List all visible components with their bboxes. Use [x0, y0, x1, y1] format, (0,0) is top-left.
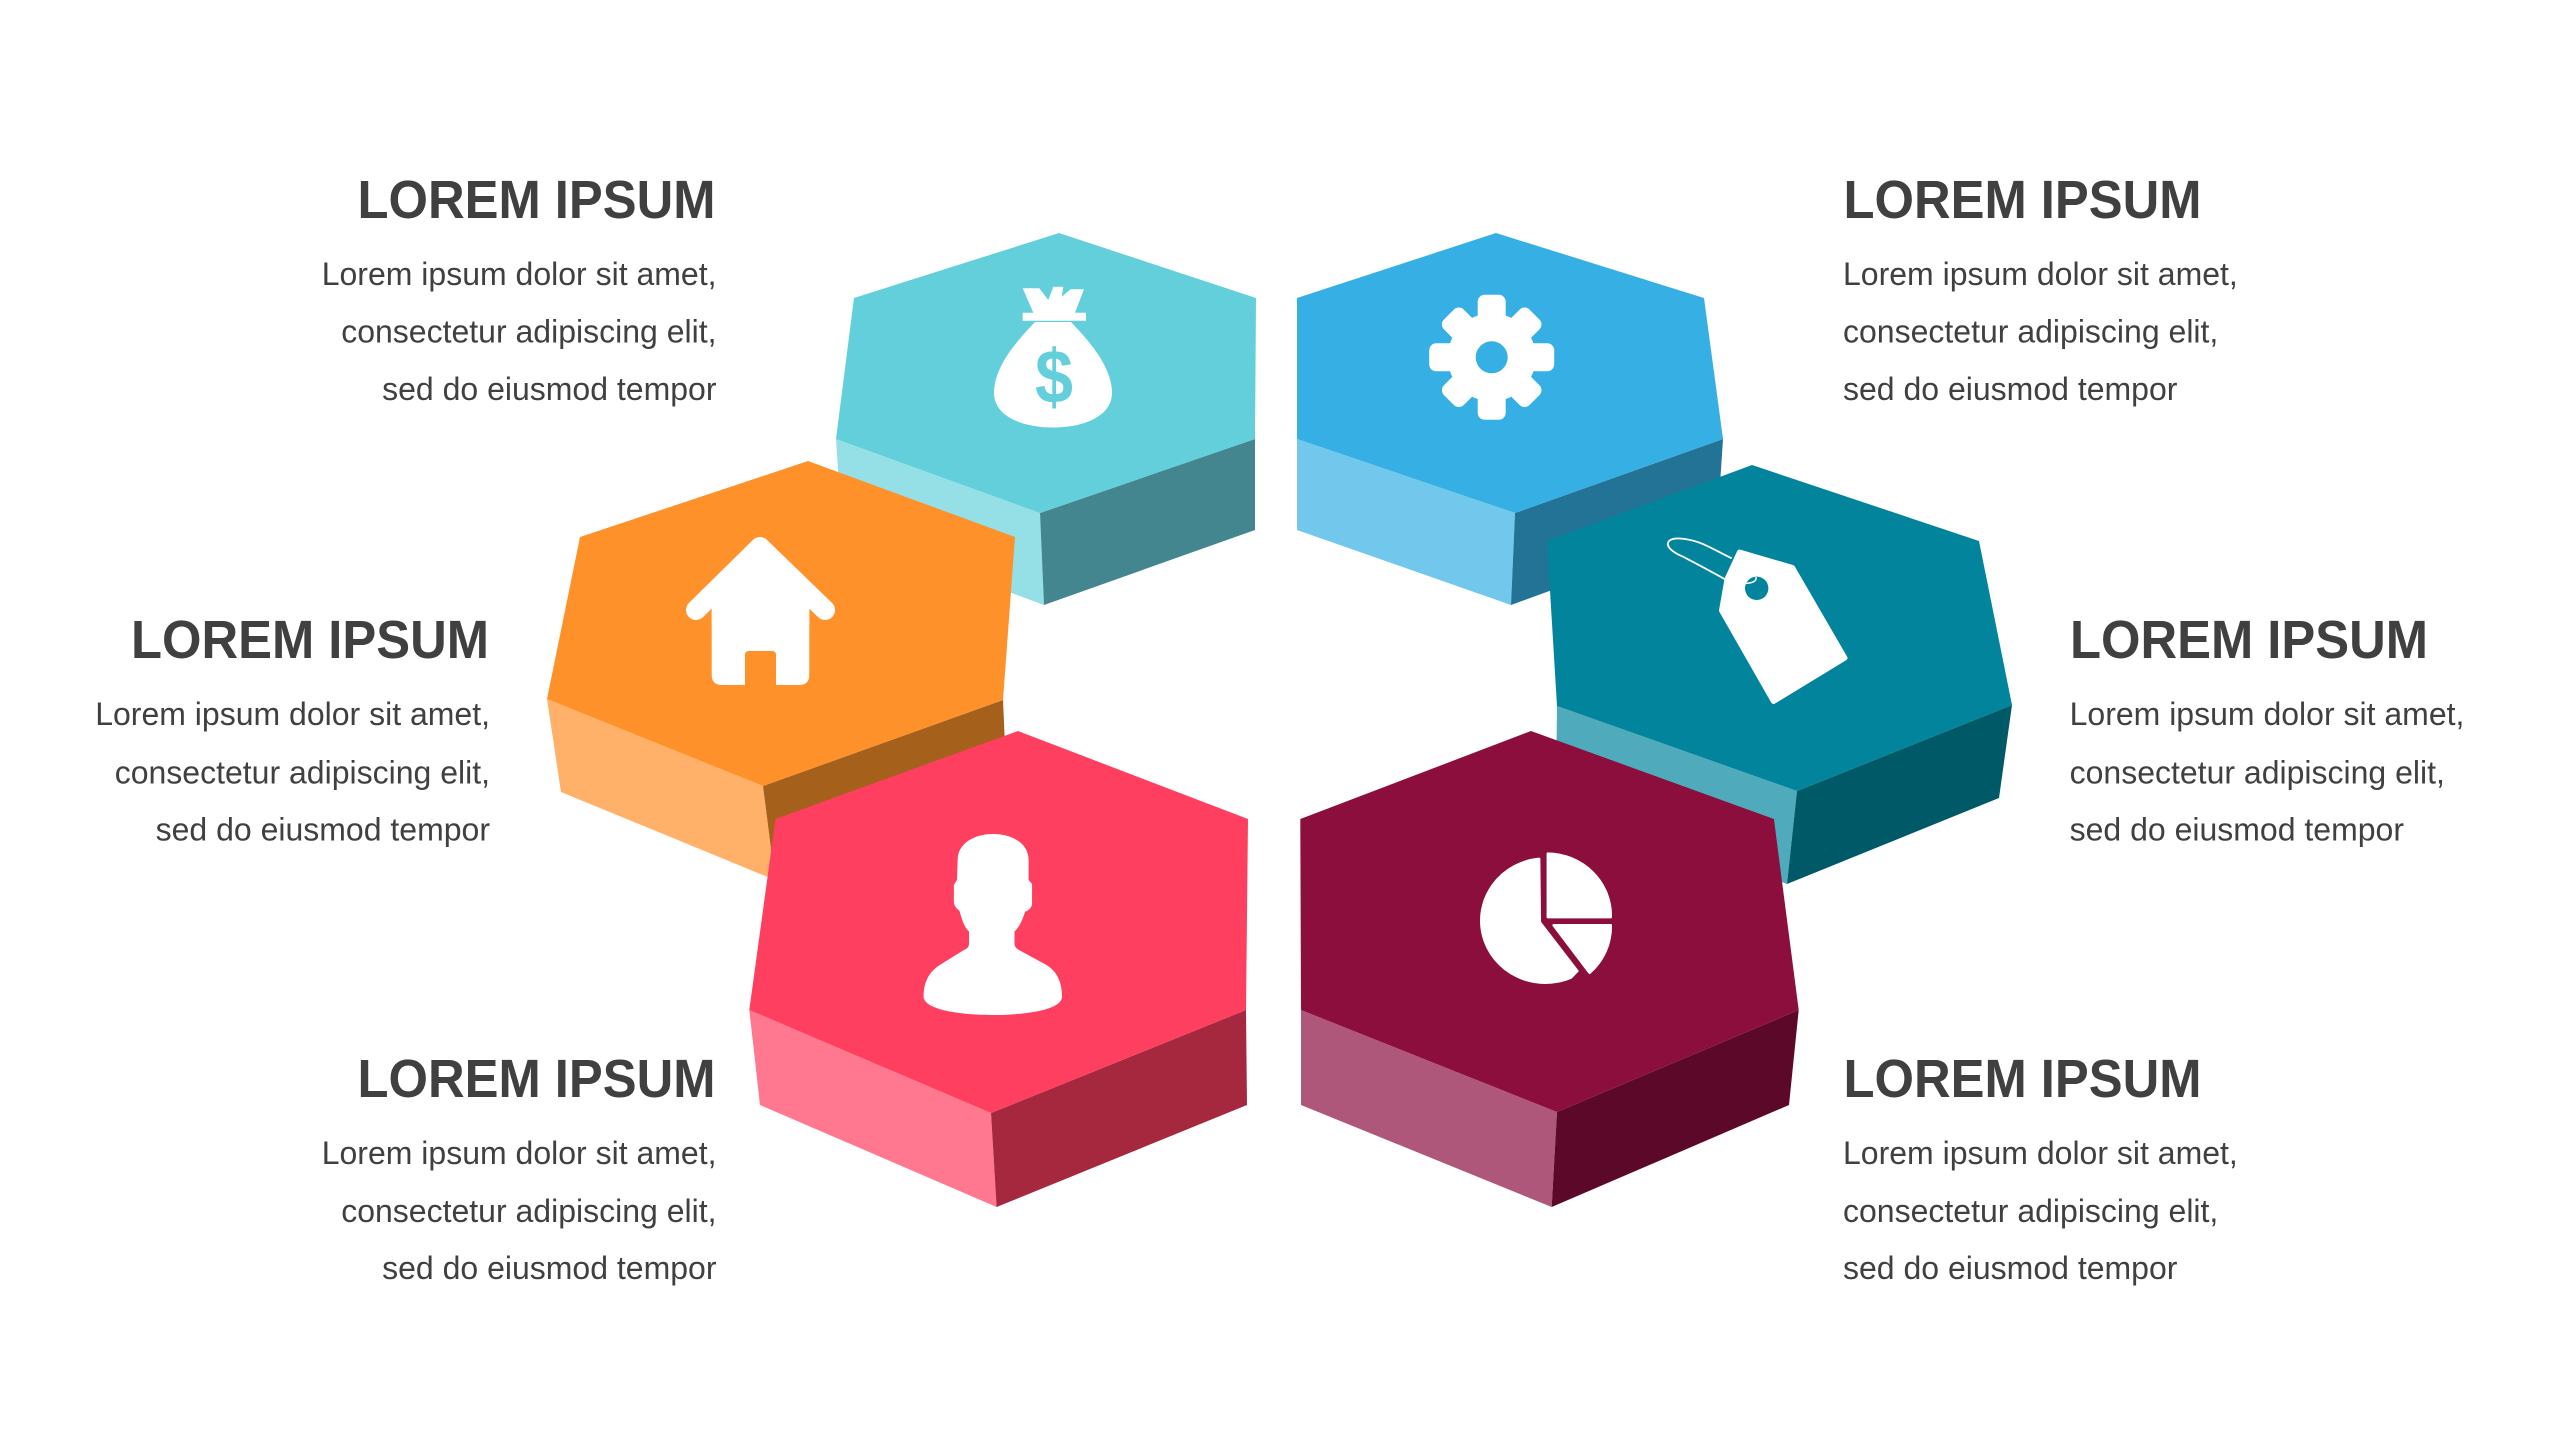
text block: middle left: sed do eiusmod tempor: [156, 812, 490, 848]
text block: middle left: [95, 610, 490, 848]
right side face: [763, 700, 1007, 880]
text block: bottom right: Lorem ipsum dolor sit amet,: [1843, 1135, 2238, 1171]
panel: dark teal hexagon: [1547, 465, 2012, 884]
top face: [836, 233, 1256, 513]
icon: money bag: [994, 287, 1112, 428]
top face: [547, 461, 1015, 786]
top face: [1547, 465, 2012, 791]
icon: money bag: $: [1035, 335, 1073, 420]
text block: middle left: LOREM IPSUM: [131, 610, 489, 670]
left side face: [1301, 1010, 1557, 1207]
text block: top left: consectetur adipiscing elit,: [341, 314, 716, 350]
right side face: [1511, 439, 1723, 605]
text block: bottom right: sed do eiusmod tempor: [1843, 1250, 2178, 1286]
left side face: [836, 439, 1044, 605]
icon: house: [696, 547, 825, 685]
panel: red hexagon: [749, 731, 1248, 1207]
top face: [1300, 731, 1799, 1112]
text block: bottom left: Lorem ipsum dolor sit amet,: [322, 1135, 716, 1171]
text block: bottom left: [322, 1049, 717, 1286]
text block: top left: LOREM IPSUM: [358, 170, 716, 230]
text block: top right: [1843, 170, 2238, 407]
text block: middle right: LOREM IPSUM: [2070, 610, 2428, 670]
text block: bottom right: LOREM IPSUM: [1844, 1049, 2202, 1109]
right side face: [991, 1010, 1247, 1207]
icon: person: [924, 834, 1062, 1015]
right side face: [1040, 439, 1255, 605]
left side face: [547, 699, 775, 880]
text block: top right: consectetur adipiscing elit,: [1843, 314, 2218, 350]
left side face: [749, 1010, 997, 1207]
text block: middle right: [2070, 610, 2464, 848]
panel: light teal hexagon: [836, 233, 1256, 605]
text block: bottom left: sed do eiusmod tempor: [382, 1250, 717, 1286]
text block: top right: LOREM IPSUM: [1844, 170, 2202, 230]
panel: maroon hexagon: [1300, 731, 1799, 1207]
right side face: [1552, 1010, 1799, 1207]
right side face: [1787, 705, 2012, 884]
panel: orange hexagon: [547, 461, 1015, 880]
text block: middle right: Lorem ipsum dolor sit amet,: [2070, 696, 2464, 732]
text block: middle left: Lorem ipsum dolor sit amet,: [95, 696, 490, 732]
text block: top left: sed do eiusmod tempor: [382, 371, 717, 407]
text block: middle right: consectetur adipiscing elit,: [2070, 754, 2445, 790]
text block: top right: Lorem ipsum dolor sit amet,: [1843, 256, 2238, 292]
icon: price tag: [1668, 538, 1845, 702]
top face: [1297, 233, 1723, 513]
text block: bottom right: [1843, 1049, 2238, 1286]
text block: top left: Lorem ipsum dolor sit amet,: [322, 256, 716, 292]
text block: top right: sed do eiusmod tempor: [1843, 371, 2178, 407]
left side face: [1556, 706, 1797, 884]
top face: [749, 731, 1248, 1113]
text block: bottom left: consectetur adipiscing elit,: [341, 1193, 716, 1229]
text block: bottom left: LOREM IPSUM: [358, 1049, 716, 1109]
text block: top left: [322, 170, 717, 407]
panel: blue hexagon: [1297, 233, 1723, 605]
text block: middle right: sed do eiusmod tempor: [2070, 812, 2404, 848]
icon: pie chart: [1481, 854, 1611, 983]
icon: gear: [1429, 295, 1554, 420]
text block: bottom right: consectetur adipiscing elit,: [1843, 1193, 2218, 1229]
text block: middle left: consectetur adipiscing elit,: [115, 754, 490, 790]
left side face: [1297, 439, 1515, 605]
